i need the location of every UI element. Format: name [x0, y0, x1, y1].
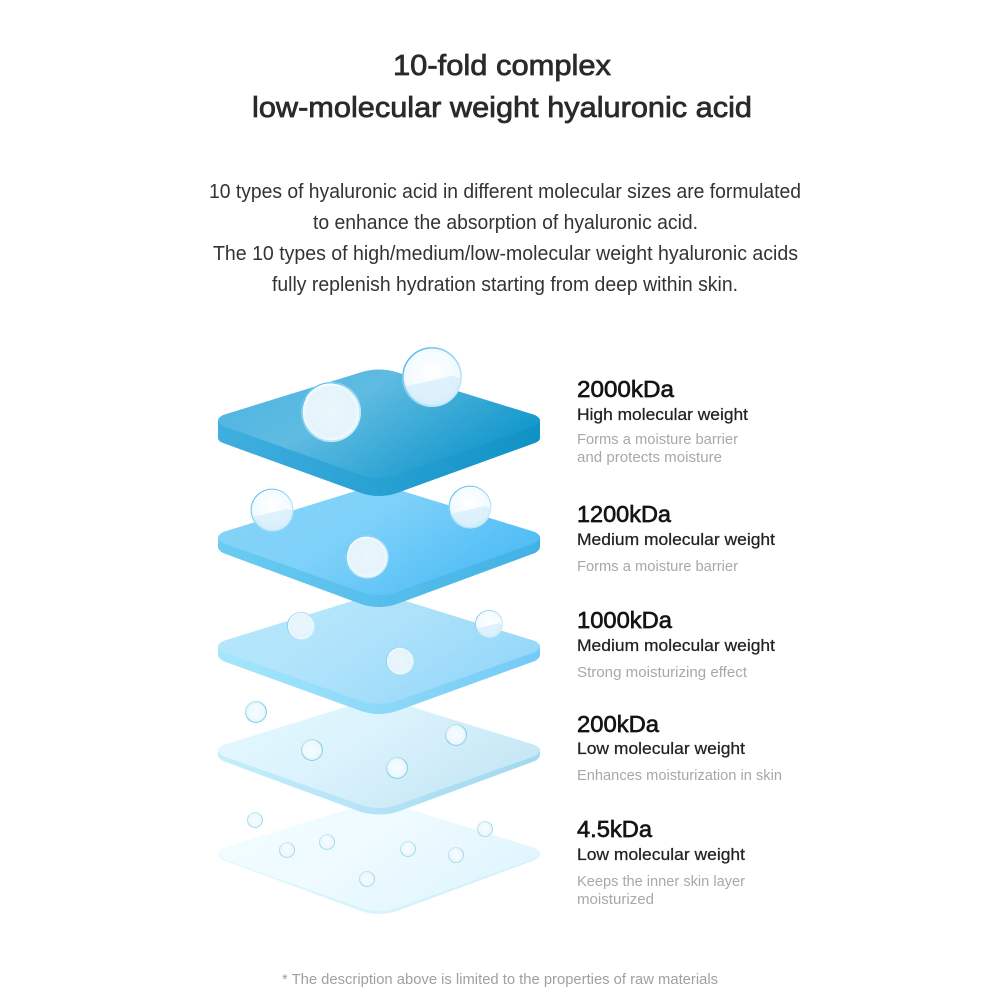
- intro text block: 10 types of hyaluronic acid in different molecular sizes are formulated: [209, 181, 801, 203]
- layer 5 bubbles: [247, 812, 493, 887]
- intro text block: [209, 181, 801, 296]
- layer 4 bubbles: [245, 701, 467, 779]
- label: 2000kDa: 2000kDa: [577, 376, 674, 402]
- label: 4.5kDa: Low molecular weight: [577, 845, 745, 864]
- intro text block: fully replenish hydration starting from deep within skin.: [272, 274, 738, 296]
- label: 2000kDa: Forms a moisture barrier: [577, 431, 738, 448]
- layer 2 bubbles: [250, 486, 494, 578]
- layer 3: 1000kDa plate: [218, 596, 540, 714]
- layer 1: 2000kDa plate: [218, 370, 540, 496]
- label: 1200kDa: Forms a moisture barrier: [577, 558, 738, 575]
- layer 5: 4.5kDa plate: [218, 802, 540, 914]
- label: 4.5kDa: [577, 816, 745, 908]
- label: 1000kDa: [577, 607, 775, 681]
- label: 1000kDa: Medium molecular weight: [577, 636, 775, 655]
- label: 200kDa: Enhances moisturization in skin: [577, 767, 782, 784]
- label: 200kDa: Low molecular weight: [577, 739, 745, 758]
- intro text block: The 10 types of high/medium/low-molecular weight hyaluronic acids: [213, 243, 798, 265]
- label: 200kDa: 200kDa: [577, 711, 659, 737]
- label: 1200kDa: 1200kDa: [577, 501, 671, 527]
- label: 1200kDa: [577, 501, 775, 575]
- footnote: * The description above is limited to the properties of raw materials: [282, 972, 718, 988]
- label: 2000kDa: High molecular weight: [577, 405, 748, 424]
- title: low-molecular weight hyaluronic acid: [252, 92, 752, 124]
- label: 2000kDa: [577, 376, 748, 466]
- label: 4.5kDa: Keeps the inner skin layer: [577, 873, 745, 890]
- label: 200kDa: [577, 711, 782, 784]
- label: 1000kDa: 1000kDa: [577, 607, 672, 633]
- intro text block: to enhance the absorption of hyaluronic acid.: [313, 212, 698, 234]
- label: 4.5kDa: moisturized: [577, 891, 654, 908]
- label: 1200kDa: Medium molecular weight: [577, 530, 775, 549]
- layer 3 bubbles: [287, 610, 504, 675]
- title: 10-fold complex: [393, 50, 612, 82]
- layer 1 bubbles: [301, 347, 465, 442]
- layer 4: 200kDa plate: [218, 700, 540, 814]
- label: 1000kDa: Strong moisturizing effect: [577, 664, 748, 681]
- label: 2000kDa: and protects moisture: [577, 449, 722, 466]
- label: 4.5kDa: 4.5kDa: [577, 816, 652, 842]
- title: [252, 50, 752, 124]
- layer 2: 1200kDa plate: [218, 486, 540, 607]
